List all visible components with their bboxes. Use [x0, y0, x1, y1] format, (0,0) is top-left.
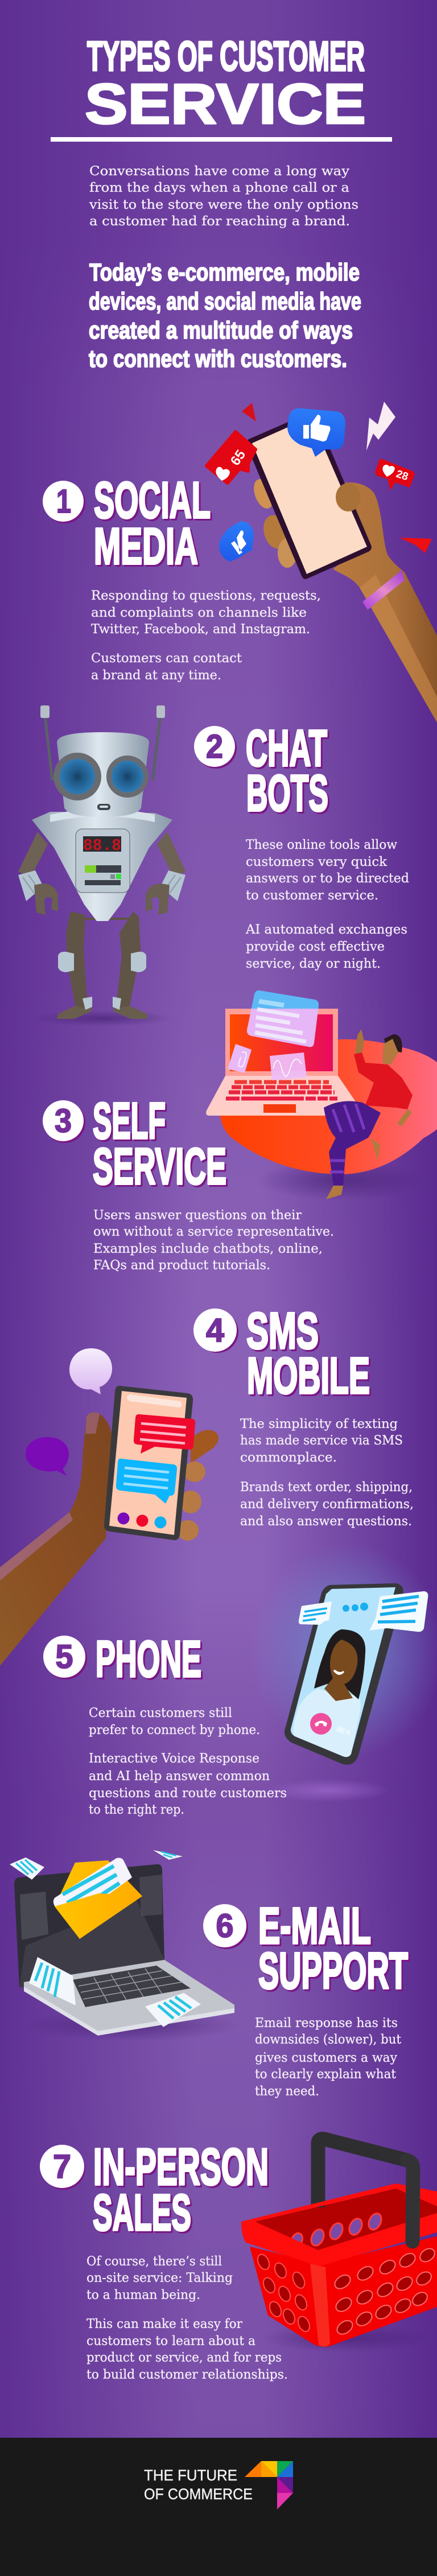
- heading: [246, 720, 330, 824]
- heading: PHONE: [96, 1631, 201, 1688]
- heading: BOTS: [248, 767, 330, 824]
- icon: light speech bubble: [69, 1348, 112, 1394]
- intro text: visit to the store were the only options: [89, 198, 358, 212]
- number badge 1: [43, 481, 85, 523]
- text block: product or service, and for reps: [86, 2351, 282, 2365]
- icon: red triangle right: [399, 538, 432, 553]
- intro text: [89, 164, 358, 229]
- text block: on-site service: Talking: [86, 2271, 233, 2285]
- text block: own without a service representative.: [93, 1225, 334, 1239]
- icon: large like bubble: [287, 408, 345, 457]
- heading: SELF: [93, 1093, 166, 1150]
- logo icon: [245, 2461, 293, 2509]
- text block: to customer service.: [246, 889, 378, 903]
- heading: SALES: [93, 2185, 191, 2241]
- text block: to the right rep.: [89, 1803, 184, 1817]
- text block: Examples include chatbots, online,: [93, 1242, 323, 1256]
- panel: chat bots: [18, 705, 409, 1026]
- illustration: hand holding phone with chat bubbles: [0, 1348, 218, 1666]
- heading: [93, 2139, 270, 2243]
- heading: SOCIAL: [94, 472, 211, 529]
- blue chat bubble: [116, 1459, 177, 1504]
- illustration: phone video call: [250, 1542, 437, 1802]
- text block: Users answer questions on their: [93, 1208, 302, 1223]
- text block: to clearly explain what: [255, 2067, 396, 2082]
- text block: [240, 1417, 414, 1529]
- heading: [93, 1093, 228, 1197]
- heading: E-MAIL: [258, 1898, 371, 1955]
- text block: This can make it easy for: [86, 2317, 242, 2331]
- illustration: hand holding phone with social reactions: [207, 402, 437, 723]
- envelope: [53, 1858, 142, 1939]
- number badge 6: 6: [216, 1908, 233, 1945]
- text block: a brand at any time.: [91, 668, 221, 683]
- heading: MEDIA: [94, 518, 198, 575]
- text block: Interactive Voice Response: [89, 1752, 259, 1766]
- robot legs: [57, 911, 148, 1019]
- person: [324, 1029, 413, 1199]
- number badge 6: [203, 1904, 248, 1949]
- laptop base: [24, 1960, 234, 2036]
- icon: flying paper top: [153, 1850, 183, 1860]
- logo text: THE FUTURE: [144, 2467, 237, 2484]
- red chat bubble: [134, 1414, 195, 1454]
- number badge 2: [194, 726, 237, 769]
- icon: red 28 badge: 28: [394, 468, 410, 483]
- icon: paper left: [29, 1957, 76, 2005]
- intro text: from the days when a phone call or a: [89, 181, 349, 195]
- front holes: [332, 2246, 437, 2337]
- heading: SALES: [94, 2186, 193, 2243]
- heading: SOCIAL: [96, 474, 212, 531]
- text block: has made service via SMS: [240, 1434, 403, 1448]
- text block: The simplicity of texting: [240, 1417, 398, 1431]
- text block: questions and route customers: [89, 1786, 287, 1801]
- basket handle front: [407, 2160, 413, 2241]
- number badge 7: [40, 2145, 85, 2190]
- title: SERVICE: [85, 72, 366, 136]
- icon: red 65 badge: [207, 432, 255, 483]
- text block: [86, 2255, 288, 2382]
- inner holes: [290, 2211, 384, 2248]
- text block: service, day or night.: [246, 957, 381, 971]
- laptop keyboard: [226, 1082, 337, 1099]
- illustration: red shopping basket: [241, 2139, 437, 2352]
- intro statement: created a multitude of ways: [89, 317, 353, 344]
- basket rim: [241, 2183, 437, 2265]
- title: [51, 34, 392, 142]
- number badge 4: 4: [206, 1312, 224, 1349]
- illustration: robot: [18, 705, 185, 1026]
- text block: Email response has its: [255, 2016, 398, 2030]
- panel: sms mobile: [0, 1303, 414, 1666]
- illustration: laptop and person on red blob: [206, 990, 437, 1200]
- number badge 5: [43, 1636, 87, 1679]
- heading: SERVICE: [93, 1138, 226, 1195]
- icon: paper bottom: [145, 1993, 201, 2027]
- text block: [89, 1706, 287, 1817]
- text block: and also answer questions.: [240, 1514, 412, 1529]
- text block: and AI help answer common: [89, 1769, 270, 1784]
- icon: purple speech bubble: [26, 1437, 69, 1476]
- text block: customers very quick: [246, 855, 387, 869]
- logo text: OF COMMERCE: [144, 2486, 253, 2503]
- basket body: [250, 2236, 437, 2347]
- number badge 5: 5: [56, 1638, 73, 1675]
- floating card: [247, 990, 319, 1047]
- text block: they need.: [255, 2084, 319, 2099]
- text block: provide cost effective: [246, 940, 385, 954]
- text block: downsides (slower), but: [255, 2033, 401, 2047]
- footer: [0, 2438, 437, 2576]
- panel: phone: [43, 1542, 437, 1817]
- text block: Certain customers still: [89, 1706, 232, 1720]
- intro statement: Today’s e-commerce, mobile: [89, 259, 360, 286]
- icon: flying paper top left: [10, 1857, 44, 1880]
- text block: prefer to connect by phone.: [89, 1723, 260, 1737]
- icon: red 28 badge: [375, 459, 415, 490]
- icon: small like bubble: [219, 521, 254, 562]
- hand: [0, 1412, 218, 1666]
- text block: [93, 1208, 334, 1273]
- text block: FAQs and product tutorials.: [93, 1258, 270, 1273]
- text block: These online tools allow: [246, 838, 397, 852]
- heading: [258, 1898, 410, 2001]
- heading: CHAT: [248, 722, 329, 779]
- panel: e-mail support: [10, 1850, 410, 2099]
- text block: to a human being.: [86, 2288, 200, 2302]
- number badge 1: 1: [56, 483, 71, 520]
- chat bubble right: [369, 1591, 428, 1632]
- heading: [96, 1631, 203, 1690]
- intro statement: to connect with customers.: [89, 345, 347, 373]
- icon: red 65 badge: 65: [228, 447, 249, 468]
- text block: Of course, there’s still: [86, 2255, 222, 2269]
- heading: MEDIA: [96, 520, 200, 577]
- heading: IN-PERSON: [95, 2140, 270, 2198]
- number badge 3: 3: [55, 1103, 72, 1140]
- number badge 2: 2: [206, 728, 223, 765]
- woman portrait: [293, 1629, 365, 1757]
- text block: to build customer relationships.: [86, 2368, 288, 2382]
- robot head: [53, 732, 149, 817]
- heading: CHAT: [246, 720, 327, 777]
- chat bubble left: [299, 1601, 332, 1625]
- phone: [246, 412, 372, 579]
- heading: SERVICE: [94, 1140, 228, 1197]
- text block: answers or to be directed: [246, 872, 409, 886]
- text block: and complaints on channels like: [91, 606, 307, 620]
- intro text: a customer had for reaching a brand.: [89, 214, 350, 229]
- basket interior: [255, 2189, 437, 2256]
- text block: Brands text order, shipping,: [240, 1480, 413, 1495]
- heading: SELF: [94, 1095, 167, 1151]
- side holes: [255, 2253, 312, 2333]
- number badge 4: [193, 1308, 238, 1353]
- number badge 7: 7: [53, 2148, 71, 2185]
- logo text: [144, 2467, 253, 2503]
- icon: red triangle top: [242, 403, 256, 422]
- text block: AI automated exchanges: [245, 923, 407, 937]
- heading: BOTS: [246, 765, 328, 822]
- robot torso: [32, 809, 172, 921]
- text block: and delivery confirmations,: [240, 1497, 414, 1512]
- text block: [91, 589, 321, 683]
- intro statement: [89, 259, 361, 373]
- heading: [94, 472, 212, 577]
- number badge 3: [43, 1100, 85, 1143]
- text block: customers to learn about a: [86, 2334, 255, 2348]
- text block: gives customers a way: [255, 2051, 398, 2065]
- text block: Twitter, Facebook, and Instagram.: [91, 622, 310, 637]
- basket handle back: [318, 2139, 407, 2207]
- text block: [255, 2016, 401, 2099]
- panel: self service: [43, 990, 437, 1273]
- heading: SMS: [246, 1303, 319, 1360]
- heading: IN-PERSON: [93, 2139, 269, 2196]
- heading: [246, 1303, 372, 1406]
- heading: E-MAIL: [260, 1900, 373, 1956]
- heading: SMS: [248, 1304, 320, 1361]
- panel: in-person sales: [40, 2139, 437, 2382]
- robot torso: 88.8: [83, 836, 121, 855]
- illustration: laptop with envelope: [10, 1850, 239, 2041]
- text block: Responding to questions, requests,: [91, 589, 321, 603]
- panel: social media: [43, 402, 437, 723]
- heading: PHONE: [97, 1633, 203, 1690]
- intro text: Conversations have come a long way: [89, 164, 350, 179]
- text block: commonplace.: [240, 1451, 337, 1465]
- text block: Customers can contact: [91, 651, 242, 666]
- icon: lightning: [366, 402, 395, 451]
- robot arms: [18, 832, 185, 915]
- text block: [245, 838, 409, 971]
